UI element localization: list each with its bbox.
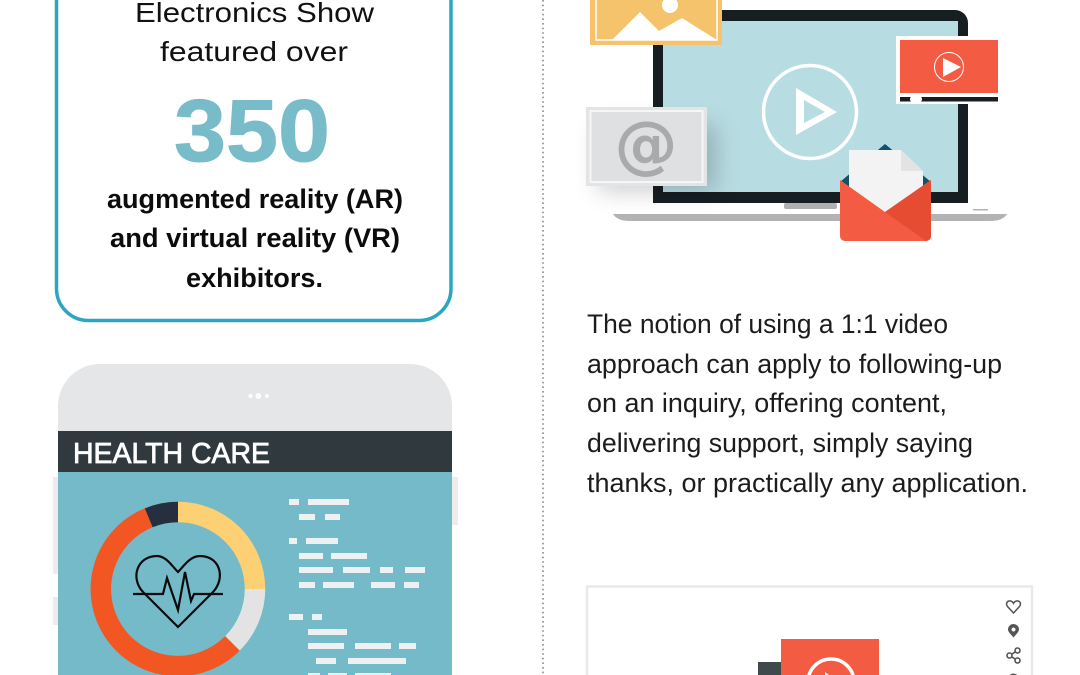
text block: 1:1 video approach [587, 309, 1028, 498]
card: image [590, 0, 722, 45]
text block: 1:1 video approach: The notion of using a 1:1 video [587, 309, 948, 339]
icon: heart [1007, 601, 1020, 613]
illustration: laptop with media cards [586, 0, 1007, 241]
panel: health care phone illustration [53, 364, 458, 675]
phone side shadows [53, 477, 458, 625]
heading bar: health care: HEALTH CARE [73, 438, 270, 470]
text placeholder bars [289, 499, 425, 675]
phone screen [58, 472, 452, 675]
heading bar: health care [58, 431, 452, 472]
laptop base [613, 203, 1007, 221]
text block: 1:1 video approach: on an inquiry, offering content, [587, 388, 947, 418]
icon: heart with pulse [133, 556, 223, 627]
panel: social video post card [587, 586, 1032, 675]
text: event intro [135, 0, 375, 67]
icon: location pin [1008, 624, 1019, 638]
text: exhibitors description: and virtual reality (VR) [110, 223, 400, 253]
card: video player [896, 36, 998, 104]
donut chart [101, 512, 255, 666]
card: at sign [586, 107, 707, 186]
text: exhibitors description: augmented reality (AR) [107, 184, 403, 214]
icon: partially visible action [1008, 674, 1019, 675]
video thumbnail [781, 639, 879, 675]
text block: 1:1 video approach: thanks, or practically any application. [587, 468, 1028, 498]
icon: open envelope [840, 144, 931, 241]
soft shadow under email card [598, 125, 716, 191]
card: at sign: @ [614, 108, 678, 181]
text: exhibitors description [107, 184, 403, 293]
phone speaker dots [248, 393, 269, 399]
laptop screen [653, 10, 968, 203]
text: exhibitors description: exhibitors. [186, 263, 323, 293]
text block: 1:1 video approach: approach can apply to following-up [587, 349, 1002, 379]
text: event intro: featured over [160, 36, 348, 67]
stat number: 350: 350 [174, 81, 330, 180]
icon: share [1007, 648, 1020, 663]
video thumbnail back layer [758, 662, 782, 675]
panel: CES statistic callout [56, 0, 451, 320]
text block: 1:1 video approach: delivering support, simply saying [587, 428, 973, 458]
icon: large play button [764, 66, 856, 158]
phone top bezel [58, 364, 452, 432]
